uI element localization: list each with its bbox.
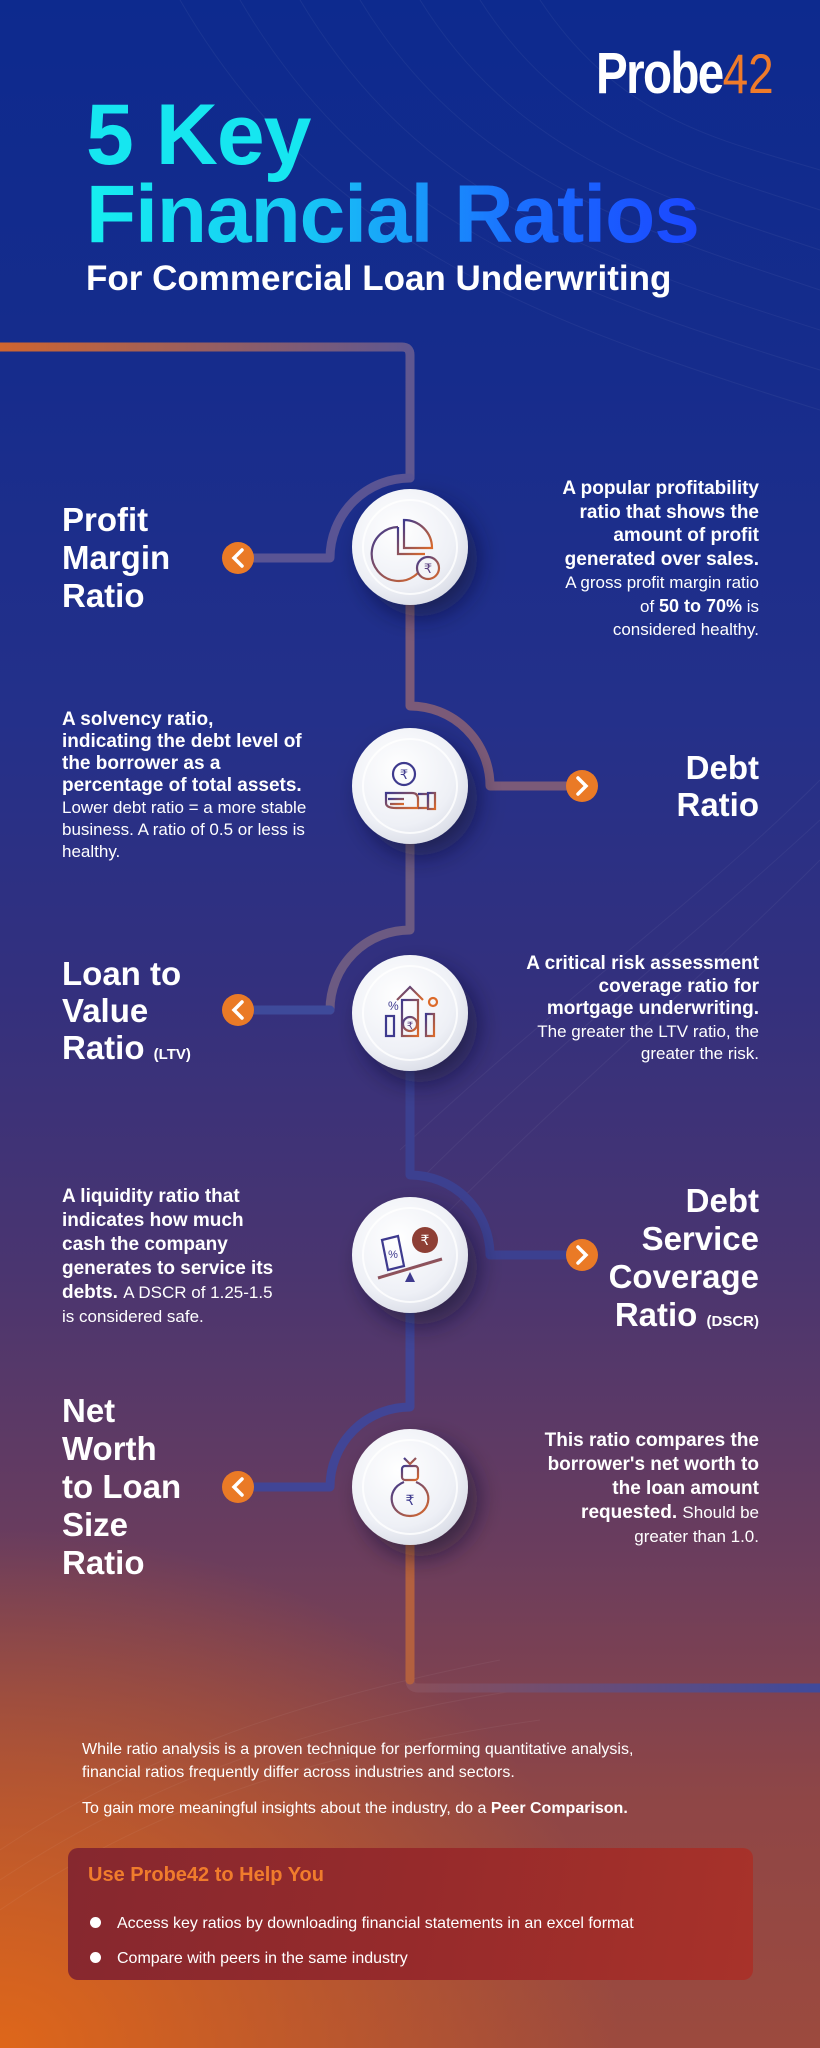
text: dscr description: debts. A DSCR of 1.25-1.5 <box>62 1282 273 1303</box>
text: conclusion: financial ratios frequently differ across industries and sectors. <box>82 1764 515 1781</box>
icon circle: ltv (house, bars, money bag): ₹ <box>407 1021 413 1032</box>
text: dscr description: generates to service its <box>62 1258 273 1279</box>
icon circle: debt ratio (coin + hand) <box>352 728 468 844</box>
text: ltv description: The greater the LTV ratio, the <box>537 1022 759 1040</box>
text: conclusion: While ratio analysis is a proven technique for performing quantitative analysis, <box>82 1741 633 1758</box>
heading: debt service coverage ratio: Coverage <box>609 1258 759 1295</box>
callout box: use probe42 <box>68 1848 753 1980</box>
heading: net worth to loan size ratio: to Loan <box>62 1468 181 1505</box>
text: profit margin description: A gross profit margin ratio <box>565 573 759 592</box>
title: 5 Key <box>86 87 310 183</box>
text: ltv description <box>526 953 759 1063</box>
text: ltv description: mortgage underwriting. <box>547 998 759 1019</box>
text: profit margin description: A popular profitability <box>562 478 759 499</box>
bullet list <box>90 1915 634 1967</box>
icon circle: ltv (house, bars, money bag): % <box>388 999 399 1013</box>
text: dscr description: cash the company <box>62 1234 228 1255</box>
text: debt ratio description: business. A ratio of 0.5 or less is <box>62 820 305 839</box>
heading: net worth to loan size ratio <box>62 1392 181 1581</box>
text: net worth description: borrower's net worth to <box>548 1454 759 1475</box>
text: debt ratio description: the borrower as a <box>62 753 220 774</box>
arrow: net worth <box>222 1471 254 1503</box>
heading: debt ratio: Debt <box>686 749 759 786</box>
text: debt ratio description: healthy. <box>62 842 120 861</box>
text: debt ratio description: indicating the debt level of <box>62 731 302 752</box>
icon circle: dscr (seesaw, percent, rupee coin): ₹ <box>421 1232 430 1248</box>
heading: net worth to loan size ratio: Size <box>62 1506 128 1543</box>
heading: net worth to loan size ratio: Ratio <box>62 1544 144 1581</box>
heading: debt service coverage ratio: Debt <box>686 1182 759 1219</box>
text: profit margin description <box>562 478 759 639</box>
text: dscr description <box>62 1186 273 1326</box>
text: profit margin description: ratio that shows the <box>580 502 759 522</box>
text: debt ratio description <box>62 709 306 861</box>
icon circle: debt ratio (coin + hand): ₹ <box>400 767 408 782</box>
heading: debt ratio: Ratio <box>676 786 759 823</box>
heading: debt service coverage ratio: Ratio (DSCR) <box>615 1296 759 1333</box>
text: dscr description: indicates how much <box>62 1210 244 1231</box>
heading: loan to value ratio: Ratio (LTV) <box>62 1029 191 1066</box>
text: ltv description: A critical risk assessment <box>526 953 759 974</box>
arrow: dscr <box>566 1239 598 1271</box>
icon circle: ltv (house, bars, money bag) <box>352 955 468 1071</box>
text: dscr description: is considered safe. <box>62 1307 204 1326</box>
icon circle: profit margin (pie chart + rupee): ₹ <box>424 561 432 576</box>
heading: net worth to loan size ratio: Worth <box>62 1430 157 1467</box>
heading: loan to value ratio <box>62 955 191 1066</box>
arrow: debt ratio <box>566 770 598 802</box>
text: ltv description: greater the risk. <box>641 1044 759 1063</box>
icon circle: dscr (seesaw, percent, rupee coin) <box>352 1197 468 1313</box>
callout heading: Use Probe42 to Help You <box>88 1864 324 1886</box>
heading: debt ratio <box>676 749 759 823</box>
icon circle: net worth (money bag) <box>352 1429 468 1545</box>
logo: Probe42 <box>596 41 774 106</box>
text: profit margin description: generated over sales. <box>565 548 759 570</box>
icon circle: profit margin (pie chart + rupee) <box>352 489 468 605</box>
icon circle: net worth (money bag): ₹ <box>406 1492 415 1508</box>
text: dscr description: A liquidity ratio that <box>62 1186 240 1207</box>
heading: profit margin ratio: Profit <box>62 501 148 538</box>
title <box>86 87 699 260</box>
text: net worth description: This ratio compares the <box>545 1430 759 1451</box>
text: conclusion <box>82 1741 633 1817</box>
heading: debt service coverage ratio: Service <box>642 1220 759 1257</box>
text: ltv description: coverage ratio for <box>598 976 759 996</box>
arrow: profit margin <box>222 542 254 574</box>
text: debt ratio description: Lower debt ratio = a more stable <box>62 798 306 817</box>
text: net worth description <box>544 1430 759 1546</box>
text: profit margin description: amount of profit <box>613 525 759 546</box>
text: debt ratio description: percentage of total assets. <box>62 775 302 796</box>
title: Financial Ratios <box>86 169 699 260</box>
text: net worth description: the loan amount <box>612 1478 759 1499</box>
arrow: ltv <box>222 994 254 1026</box>
text: profit margin description: of 50 to 70% is <box>640 596 759 616</box>
heading: loan to value ratio: Loan to <box>62 955 181 992</box>
heading: debt service coverage ratio <box>609 1182 759 1333</box>
text: net worth description: requested. Should be <box>581 1502 759 1523</box>
bullet list: Compare with peers in the same industry <box>117 1950 408 1967</box>
icon circle: dscr (seesaw, percent, rupee coin): % <box>388 1249 398 1261</box>
text: debt ratio description: A solvency ratio, <box>62 709 213 730</box>
bullet list: Access key ratios by downloading financial statements in an excel format <box>117 1915 634 1932</box>
subtitle: For Commercial Loan Underwriting <box>86 259 671 298</box>
text: profit margin description: considered healthy. <box>613 620 759 639</box>
heading: profit margin ratio: Margin <box>62 539 170 576</box>
heading: profit margin ratio <box>62 501 170 614</box>
heading: profit margin ratio: Ratio <box>62 577 144 614</box>
heading: loan to value ratio: Value <box>62 992 148 1029</box>
text: conclusion: To gain more meaningful insights about the industry, do a Peer Comparison. <box>82 1800 628 1817</box>
text: net worth description: greater than 1.0. <box>634 1527 759 1546</box>
heading: net worth to loan size ratio: Net <box>62 1392 115 1429</box>
